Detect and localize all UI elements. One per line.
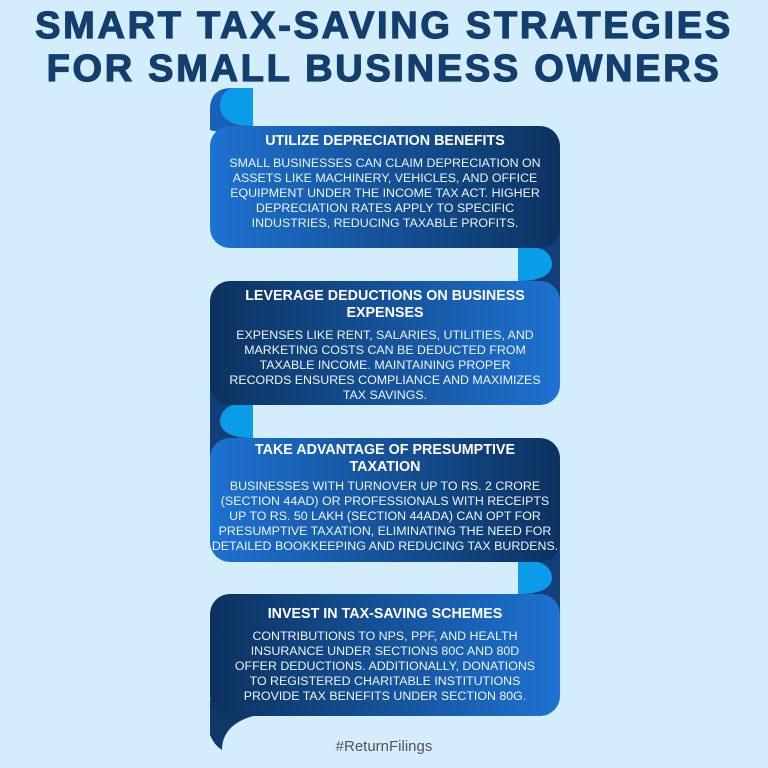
panel: presumptive: TAKE ADVANTAGE OF PRESUMPTIVE (255, 442, 515, 458)
title: SMART TAX-SAVING STRATEGIES (35, 5, 733, 47)
panel: deductions: MARKETING COSTS CAN BE DEDUCTED FROM (244, 343, 526, 357)
panel: depreciation: DEPRECIATION RATES APPLY TO SPECIFIC (256, 201, 514, 215)
panel: deductions: EXPENSES (346, 305, 424, 321)
panel: deductions: LEVERAGE DEDUCTIONS ON BUSINESS (245, 288, 525, 304)
title (35, 5, 733, 90)
panel: depreciation: ASSETS LIKE MACHINERY, VEHICLES, AND OFFICE (233, 171, 537, 185)
panel: presumptive: BUSINESSES WITH TURNOVER UP TO RS. 2 CRORE (230, 479, 540, 493)
panel: presumptive: UP TO RS. 50 LAKH (SECTION 44ADA) CAN OPT FOR (229, 509, 541, 523)
panel: depreciation: INDUSTRIES, REDUCING TAXABLE PROFITS. (252, 216, 518, 230)
left curl top (210, 88, 253, 140)
panel: presumptive: DETAILED BOOKKEEPING AND REDUCING TAX BURDENS. (212, 539, 558, 553)
panel: depreciation: UTILIZE DEPRECIATION BENEFITS (265, 133, 505, 149)
panel: schemes: INSURANCE UNDER SECTIONS 80C AND 80D (251, 644, 519, 658)
connector left 2-3 (210, 380, 253, 460)
panel: schemes (235, 606, 535, 703)
panel: presumptive (212, 442, 558, 553)
panel: deductions: RECORDS ENSURES COMPLIANCE AND MAXIMIZES (229, 373, 541, 387)
panel: schemes: PROVIDE TAX BENEFITS UNDER SECTION 80G. (244, 689, 526, 703)
panel: deductions: EXPENSES LIKE RENT, SALARIES, UTILITIES, AND (236, 328, 534, 342)
panel: deductions (229, 288, 541, 402)
connector right 3-4 (518, 535, 560, 615)
panel: depreciation: EQUIPMENT UNDER THE INCOME TAX ACT. HIGHER (230, 186, 540, 200)
panel: schemes: CONTRIBUTIONS TO NPS, PPF, AND HEALTH (252, 629, 518, 643)
panel: schemes: OFFER DEDUCTIONS. ADDITIONALLY, DONATIONS (235, 659, 535, 673)
panel: presumptive: (SECTION 44AD) OR PROFESSIONALS WITH RECEIPTS (221, 494, 549, 508)
panel: schemes: INVEST IN TAX-SAVING SCHEMES (268, 606, 502, 622)
panel: deductions: TAXABLE INCOME. MAINTAINING PROPER (260, 358, 510, 372)
panel: deductions: TAX SAVINGS. (343, 388, 427, 402)
title: FOR SMALL BUSINESS OWNERS (47, 48, 721, 90)
panel: presumptive: PRESUMPTIVE TAXATION, ELIMINATING THE NEED FOR (219, 524, 551, 538)
hashtag: #ReturnFilings (336, 738, 432, 755)
panel: schemes: TO REGISTERED CHARITABLE INSTITUTIONS (250, 674, 520, 688)
panel: depreciation: SMALL BUSINESSES CAN CLAIM DEPRECIATION ON (229, 156, 541, 170)
panel: presumptive: TAXATION (350, 459, 420, 475)
bottom tail (210, 700, 253, 750)
panel shapes (210, 126, 560, 248)
connector right 1-2 (518, 220, 560, 300)
panel: depreciation (229, 133, 541, 230)
